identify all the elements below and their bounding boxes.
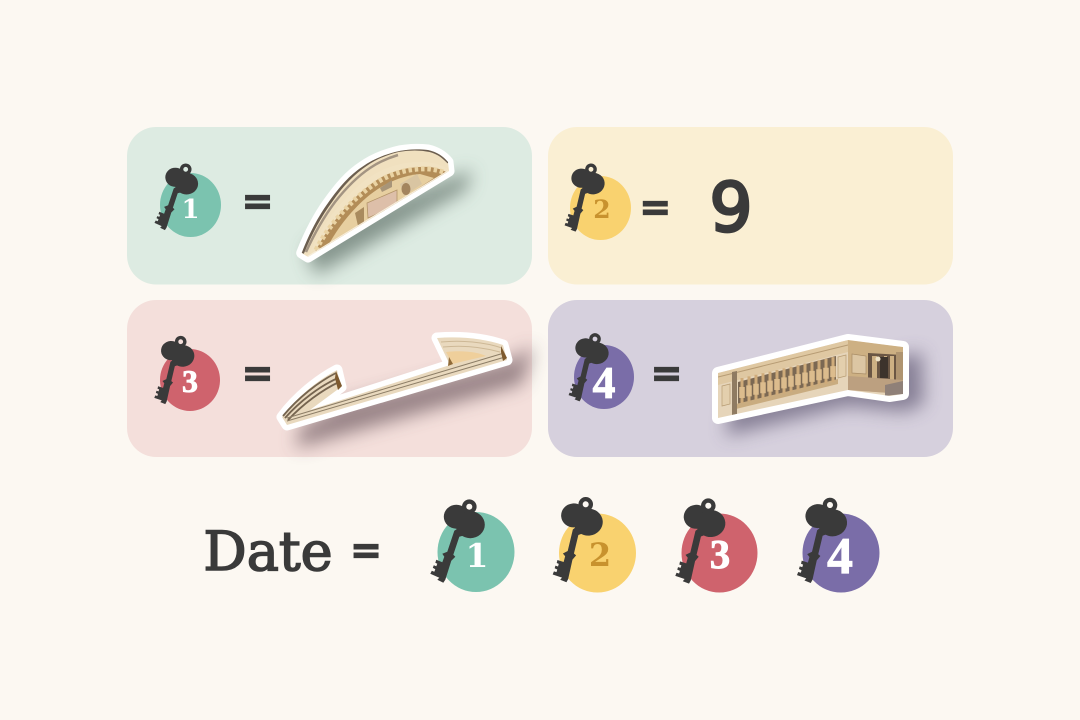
- badge: key 3 small: [149, 335, 220, 411]
- equals sign 4: =: [651, 351, 682, 395]
- badge: key 3 small: 3: [182, 363, 198, 399]
- panel: key 1: [127, 127, 532, 284]
- image: arched pediment fragment: [295, 140, 472, 275]
- image: balustrade fragment: [710, 335, 924, 436]
- equation: equals sign: =: [350, 528, 382, 572]
- badge: key 4 large: [791, 496, 880, 592]
- panel: key 3: [127, 300, 534, 457]
- panel: key 2: [548, 127, 953, 284]
- badge: key 4 small: [563, 332, 634, 409]
- badge: key 1 large: 1: [466, 536, 488, 575]
- badge: key 3 large: 3: [710, 531, 730, 577]
- equals sign 3: =: [242, 351, 273, 395]
- badge: key 2 small: 2: [593, 195, 611, 224]
- badge: key 4 large: 4: [827, 528, 853, 585]
- equals sign 2: =: [639, 185, 671, 229]
- badge: key 2 large: 2: [589, 536, 611, 574]
- panel: key 4: [548, 300, 953, 457]
- equation: date label: Date: [203, 520, 333, 583]
- number 9: 9: [709, 169, 753, 248]
- badge: key 2 large: [546, 496, 636, 592]
- image: moulding fragment: [282, 337, 534, 448]
- badge: key 1 small: [154, 163, 221, 237]
- equals sign 1: =: [242, 179, 273, 223]
- badge: key 3 large: [669, 497, 758, 592]
- badge: key 2 small: [559, 162, 631, 240]
- badge: key 4 small: 4: [592, 357, 616, 408]
- badge: key 1 large: [430, 499, 514, 592]
- badge: key 1 small: 1: [181, 195, 200, 225]
